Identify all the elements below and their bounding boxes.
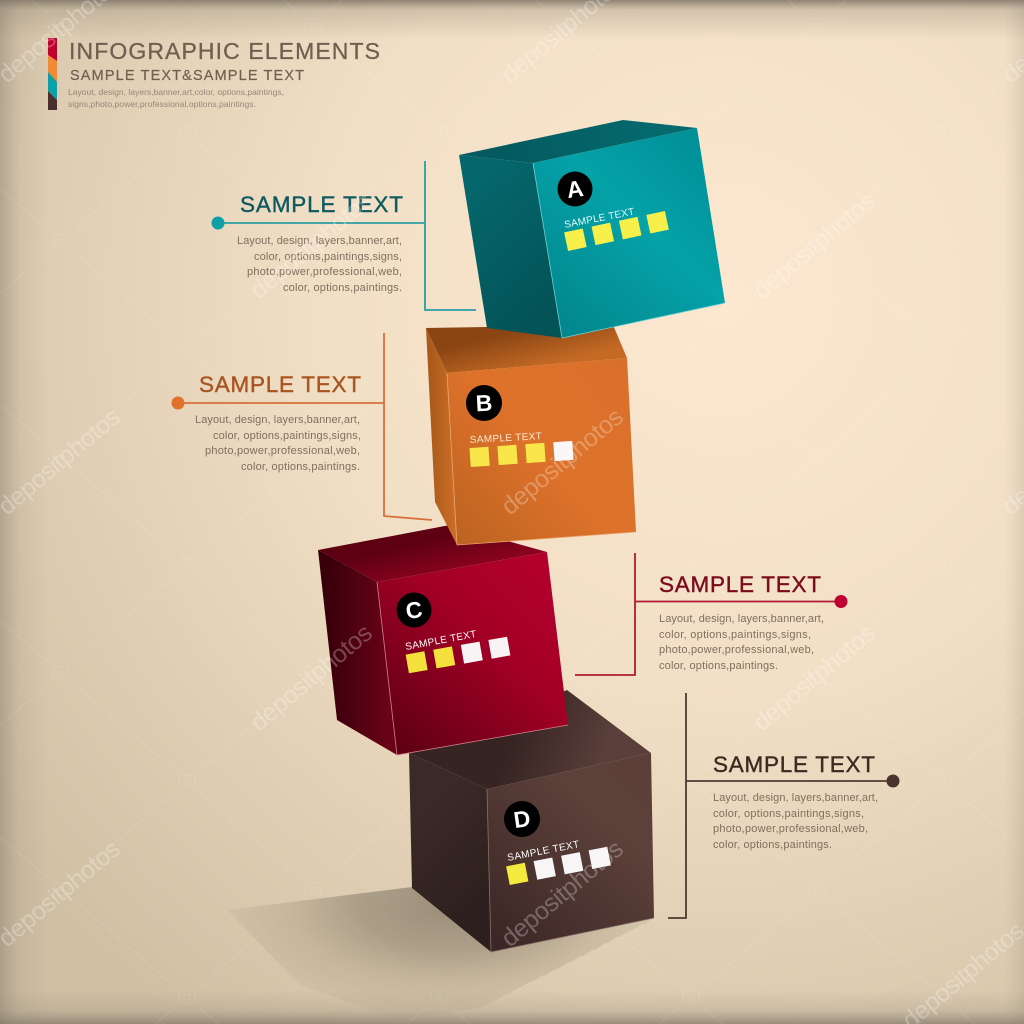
cube C — [318, 525, 568, 755]
shadow under stack — [227, 887, 654, 1020]
body D: Layout, design, layers,banner,art, — [713, 792, 878, 804]
heading: infographic elements: INFOGRAPHIC ELEMENTS — [69, 38, 380, 64]
body D — [713, 792, 878, 851]
description text — [68, 87, 284, 109]
body C — [659, 613, 824, 672]
label A: SAMPLE TEXT — [563, 207, 635, 231]
watermarks: depositphotos — [496, 835, 629, 953]
callout A — [212, 161, 476, 310]
body A: color, options,paintings. — [283, 282, 402, 294]
watermarks: depositphotos — [245, 187, 378, 305]
label C: SAMPLE TEXT — [405, 629, 477, 653]
badge A — [558, 172, 592, 206]
body A: Layout, design, layers,banner,art, — [237, 235, 402, 247]
body C: color, options,paintings,signs, — [659, 629, 811, 641]
callout D — [668, 693, 900, 918]
body C: Layout, design, layers,banner,art, — [659, 613, 824, 625]
body A: photo,power,professional,web, — [247, 266, 402, 278]
badge D: D — [512, 805, 532, 833]
watermarks: depositphotos — [748, 619, 881, 737]
badge B — [466, 385, 502, 421]
watermarks: depositphotos — [496, 403, 629, 521]
body D: color, options,paintings,signs, — [713, 808, 864, 820]
connector B — [172, 333, 432, 520]
body B: Layout, design, layers,banner,art, — [195, 414, 360, 426]
cube B — [426, 325, 636, 545]
callout C — [575, 553, 848, 675]
badge A: A — [565, 175, 585, 203]
label B: SAMPLE TEXT — [470, 431, 542, 446]
rating squares B — [469, 441, 574, 467]
title block — [48, 38, 380, 110]
watermarks: depositphotos — [748, 187, 881, 305]
body D: color, options,paintings. — [713, 839, 832, 851]
cube D — [409, 690, 654, 952]
body B: photo,power,professional,web, — [205, 445, 360, 457]
callout B — [172, 333, 432, 520]
body B: color, options,paintings. — [241, 461, 360, 473]
connector A — [212, 161, 476, 310]
badge B: B — [475, 390, 493, 416]
cube A — [459, 120, 725, 338]
connector D — [668, 693, 900, 918]
description text: Layout, design, layers,banner,art,color, options,paintings, — [68, 87, 284, 97]
rating squares C — [406, 637, 510, 673]
rating squares D — [506, 847, 611, 885]
subheading: SAMPLE TEXT&SAMPLE TEXT — [70, 68, 304, 84]
connector C — [575, 553, 848, 675]
badge C: C — [404, 596, 424, 624]
label D: SAMPLE TEXT — [506, 839, 580, 864]
body B: color, options,paintings,signs, — [213, 430, 361, 442]
rating squares A — [564, 211, 669, 251]
body B — [195, 414, 361, 473]
body A — [237, 235, 402, 294]
heading B: SAMPLE TEXT — [199, 372, 361, 397]
body A: color, options,paintings,signs, — [254, 251, 402, 263]
description text: signs,photo,power,professional,options,paintings. — [68, 99, 256, 109]
heading D: SAMPLE TEXT — [713, 752, 875, 777]
badge D — [504, 801, 540, 837]
badge C — [396, 592, 432, 628]
icon: colour bar — [48, 38, 57, 110]
watermarks: depositphotos — [245, 619, 378, 737]
heading C: SAMPLE TEXT — [659, 572, 821, 597]
body C: color, options,paintings. — [659, 660, 778, 672]
body D: photo,power,professional,web, — [713, 823, 868, 835]
heading A: SAMPLE TEXT — [240, 192, 403, 217]
body C: photo,power,professional,web, — [659, 644, 814, 656]
